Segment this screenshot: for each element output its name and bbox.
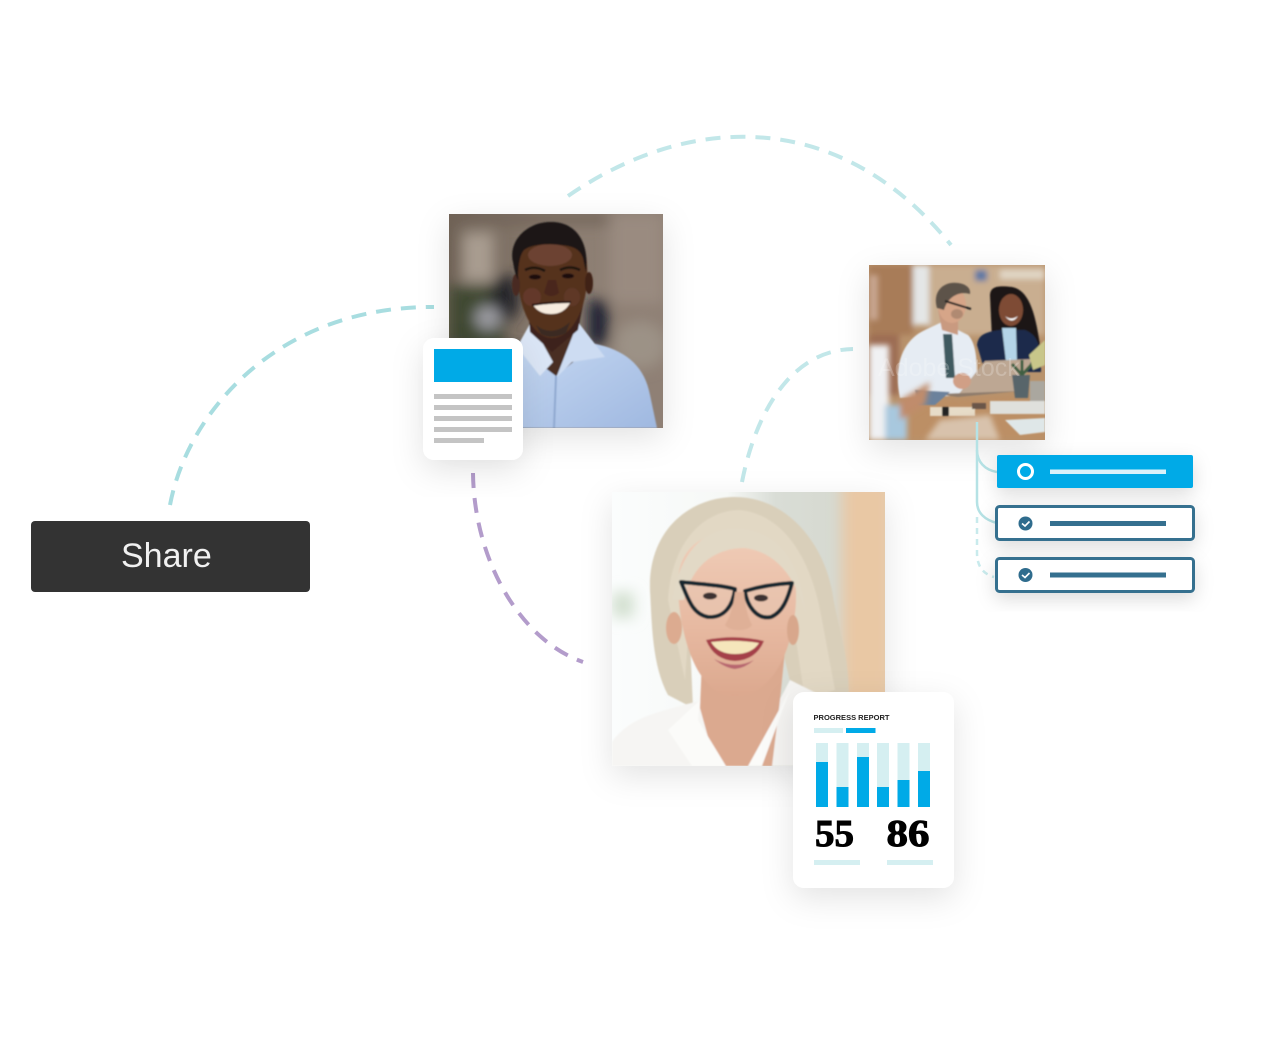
face	[678, 544, 796, 676]
document card	[423, 338, 523, 460]
smile	[533, 303, 570, 314]
shirt	[612, 702, 694, 766]
smile	[706, 637, 764, 661]
fringe	[678, 532, 796, 600]
plant, cups and desk items	[1012, 375, 1030, 398]
dashed arc: share to first portrait	[170, 307, 434, 505]
dashed arc: first portrait to meeting photo	[568, 137, 951, 245]
checked list item two	[996, 558, 1194, 592]
item line	[1050, 572, 1166, 578]
dashed arc: document to third portrait	[473, 473, 583, 662]
hair back	[650, 497, 849, 722]
icon: check circle	[1018, 568, 1032, 582]
portrait photo: smiling man	[449, 214, 666, 428]
meeting photo: two colleagues with laptop	[869, 265, 1045, 440]
list connector lines	[977, 422, 997, 577]
glasses	[681, 582, 792, 617]
report title: PROGRESS REPORT	[814, 713, 890, 722]
progress report card	[793, 692, 954, 888]
document text lines	[434, 394, 512, 443]
stat: 86: 86	[886, 813, 930, 855]
active item line	[1050, 470, 1166, 474]
item line	[1050, 521, 1166, 526]
share button	[31, 521, 310, 592]
stat: 55: 55	[815, 813, 854, 855]
eyes	[529, 274, 541, 280]
portrait photo: woman with glasses	[612, 480, 892, 780]
checked list item one	[996, 506, 1194, 540]
infographic canvas	[31, 134, 1201, 906]
icon: ring	[1018, 464, 1032, 478]
report legend	[814, 728, 876, 733]
stacked bar chart	[816, 743, 930, 807]
share label: Share	[121, 537, 212, 575]
blurred foreground	[869, 345, 889, 440]
stat: 55	[814, 813, 860, 865]
woman	[990, 286, 1040, 350]
laptop	[958, 359, 1032, 396]
face	[518, 240, 587, 338]
collar	[706, 736, 726, 766]
man	[898, 322, 977, 398]
watermark: Adobe Stock	[878, 354, 1020, 382]
dashed arc: third portrait to meeting photo	[742, 349, 853, 482]
hair	[512, 222, 587, 280]
shirt	[523, 343, 658, 428]
neck	[700, 650, 785, 766]
neck	[528, 304, 584, 351]
icon: check circle	[1018, 516, 1032, 530]
stat: 86	[886, 813, 933, 865]
document header block	[434, 349, 512, 382]
active list item	[997, 455, 1193, 488]
